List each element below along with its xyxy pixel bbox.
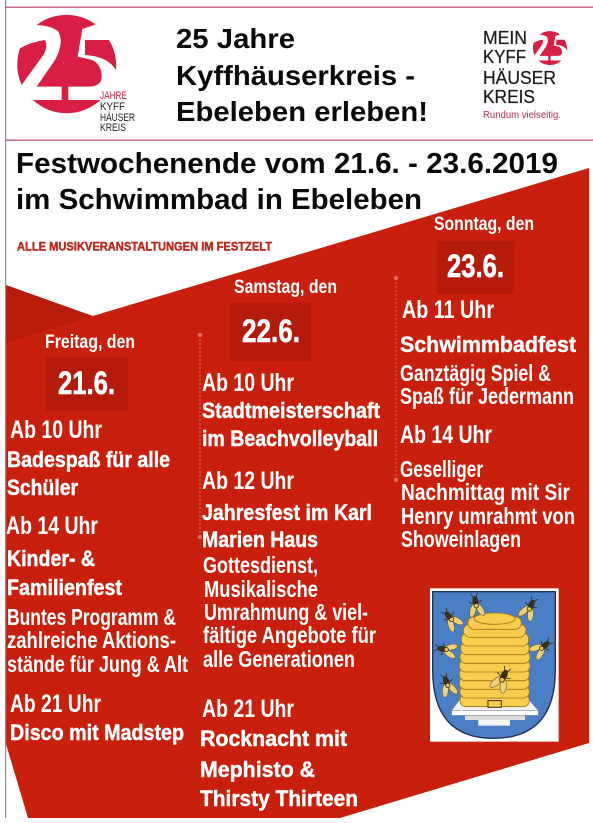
column: Samstag: Gottesdienst,	[203, 552, 318, 578]
divider dots: second column	[394, 276, 398, 482]
column: Freitag: zahlreiche Aktions-	[7, 627, 176, 653]
logo: 25 Jahre Kyffhäuserkreis: KREIS	[100, 122, 126, 134]
logo: Mein Kyffhäuser Kreis: KREIS	[483, 87, 535, 107]
column: Freitag: Ab 14 Uhr	[6, 512, 98, 540]
title: 25 Jahre Kyffhäuserkreis: 25 Jahre	[176, 23, 295, 54]
column: Freitag: Familienfest	[7, 575, 122, 600]
column: Samstag	[200, 277, 380, 811]
logo: 25 Jahre Kyffhäuserkreis	[17, 15, 135, 134]
heading: Festwochenende: Festwochenende vom 21.6. - 23.6.2019	[16, 148, 558, 180]
icon: Ebeleben coat of arms with beehive	[430, 588, 559, 742]
date header: Freitag 21.6.: Freitag, den	[45, 332, 135, 353]
date header: Samstag 22.6.	[230, 277, 337, 361]
column: Samstag: Ab 10 Uhr	[202, 369, 294, 397]
column: Freitag: Ab 21 Uhr	[10, 690, 101, 718]
column: Freitag: Disco mit Madstep	[10, 720, 184, 745]
title: 25 Jahre Kyffhäuserkreis: Kyffhäuserkreis -	[176, 60, 415, 91]
column: Freitag	[6, 332, 188, 745]
heading: Festwochenende: im Schwimmbad in Ebeleben	[16, 184, 422, 216]
column: Samstag: Musikalische	[204, 576, 318, 602]
logo: Mein Kyffhäuser Kreis: KYFF	[483, 47, 526, 67]
column: Sonntag: Geselliger	[400, 456, 483, 482]
date header: Samstag 22.6.: 22.6.	[242, 313, 300, 349]
logo: Mein Kyffhäuser Kreis: HÄUSER	[483, 68, 556, 88]
column: Freitag: Badespaß für alle	[7, 447, 170, 472]
column: Samstag: Jahresfest im Karl	[202, 500, 372, 525]
column: Samstag: Mephisto &	[200, 757, 315, 782]
hive door	[488, 701, 501, 707]
column: Sonntag: Showeinlagen	[401, 526, 521, 552]
column: Samstag: Umrahmung & viel-	[204, 599, 368, 625]
column: Samstag: im Beachvolleyball	[202, 426, 378, 451]
note: Alle Musikveranstaltungen im Festzelt: ALLE MUSIKVERANSTALTUNGEN IM FESTZELT	[17, 240, 273, 254]
logo: Mein Kyffhäuser Kreis	[483, 28, 567, 121]
column: Samstag: Ab 21 Uhr	[202, 695, 294, 723]
date header: Sonntag 23.6.: 23.6.	[447, 248, 504, 284]
column: Freitag: Ab 10 Uhr	[10, 416, 102, 444]
logo: Mein Kyffhäuser Kreis: Rundum vielseitig.	[483, 109, 561, 121]
heading: Festwochenende	[16, 148, 558, 216]
column: Sonntag: Ganztägig Spiel &	[400, 360, 551, 386]
title: 25 Jahre Kyffhäuserkreis: Ebeleben erleben!	[176, 96, 428, 127]
column: Samstag: Stadtmeisterschaft	[202, 398, 380, 423]
date header: Samstag 22.6.: Samstag, den	[234, 277, 337, 298]
column: Freitag: Kinder- &	[7, 546, 95, 571]
column: Samstag: Rocknacht mit	[200, 726, 347, 751]
bees	[433, 592, 557, 700]
column: Samstag: Marien Haus	[202, 527, 318, 552]
title: 25 Jahre Kyffhäuserkreis	[176, 23, 428, 127]
column: Freitag: Buntes Programm &	[7, 604, 176, 630]
hive base	[452, 699, 538, 726]
date header: Freitag 21.6.: 21.6.	[58, 365, 115, 401]
column: Samstag: Ab 12 Uhr	[202, 467, 294, 495]
logo: 25 Jahre Kyffhäuserkreis: KYFF	[100, 101, 125, 113]
logo: 25 Jahre Kyffhäuserkreis: HÄUSER	[100, 112, 135, 124]
column: Samstag: fältige Angebote für	[203, 622, 376, 648]
date header: Sonntag 23.6.	[434, 214, 534, 294]
column: Samstag: alle Generationen	[203, 646, 355, 672]
column: Sonntag: Schwimmbadfest	[400, 332, 576, 357]
column: Sonntag: Ab 14 Uhr	[400, 421, 492, 449]
date header: Freitag 21.6.	[45, 332, 135, 411]
date header: Sonntag 23.6.: Sonntag, den	[434, 214, 534, 235]
column: Freitag: stände für Jung & Alt	[7, 651, 188, 677]
column: Freitag: Schüler	[7, 475, 78, 500]
divider dots: first column	[198, 333, 202, 539]
beehive	[459, 613, 530, 707]
column: Samstag: Thirsty Thirteen	[200, 786, 358, 811]
logo: 25 Jahre Kyffhäuserkreis: JAHRE	[100, 90, 127, 102]
logo: Mein Kyffhäuser Kreis: MEIN	[483, 28, 527, 48]
column: Sonntag: Ab 11 Uhr	[402, 296, 494, 324]
column: Sonntag	[400, 214, 576, 552]
